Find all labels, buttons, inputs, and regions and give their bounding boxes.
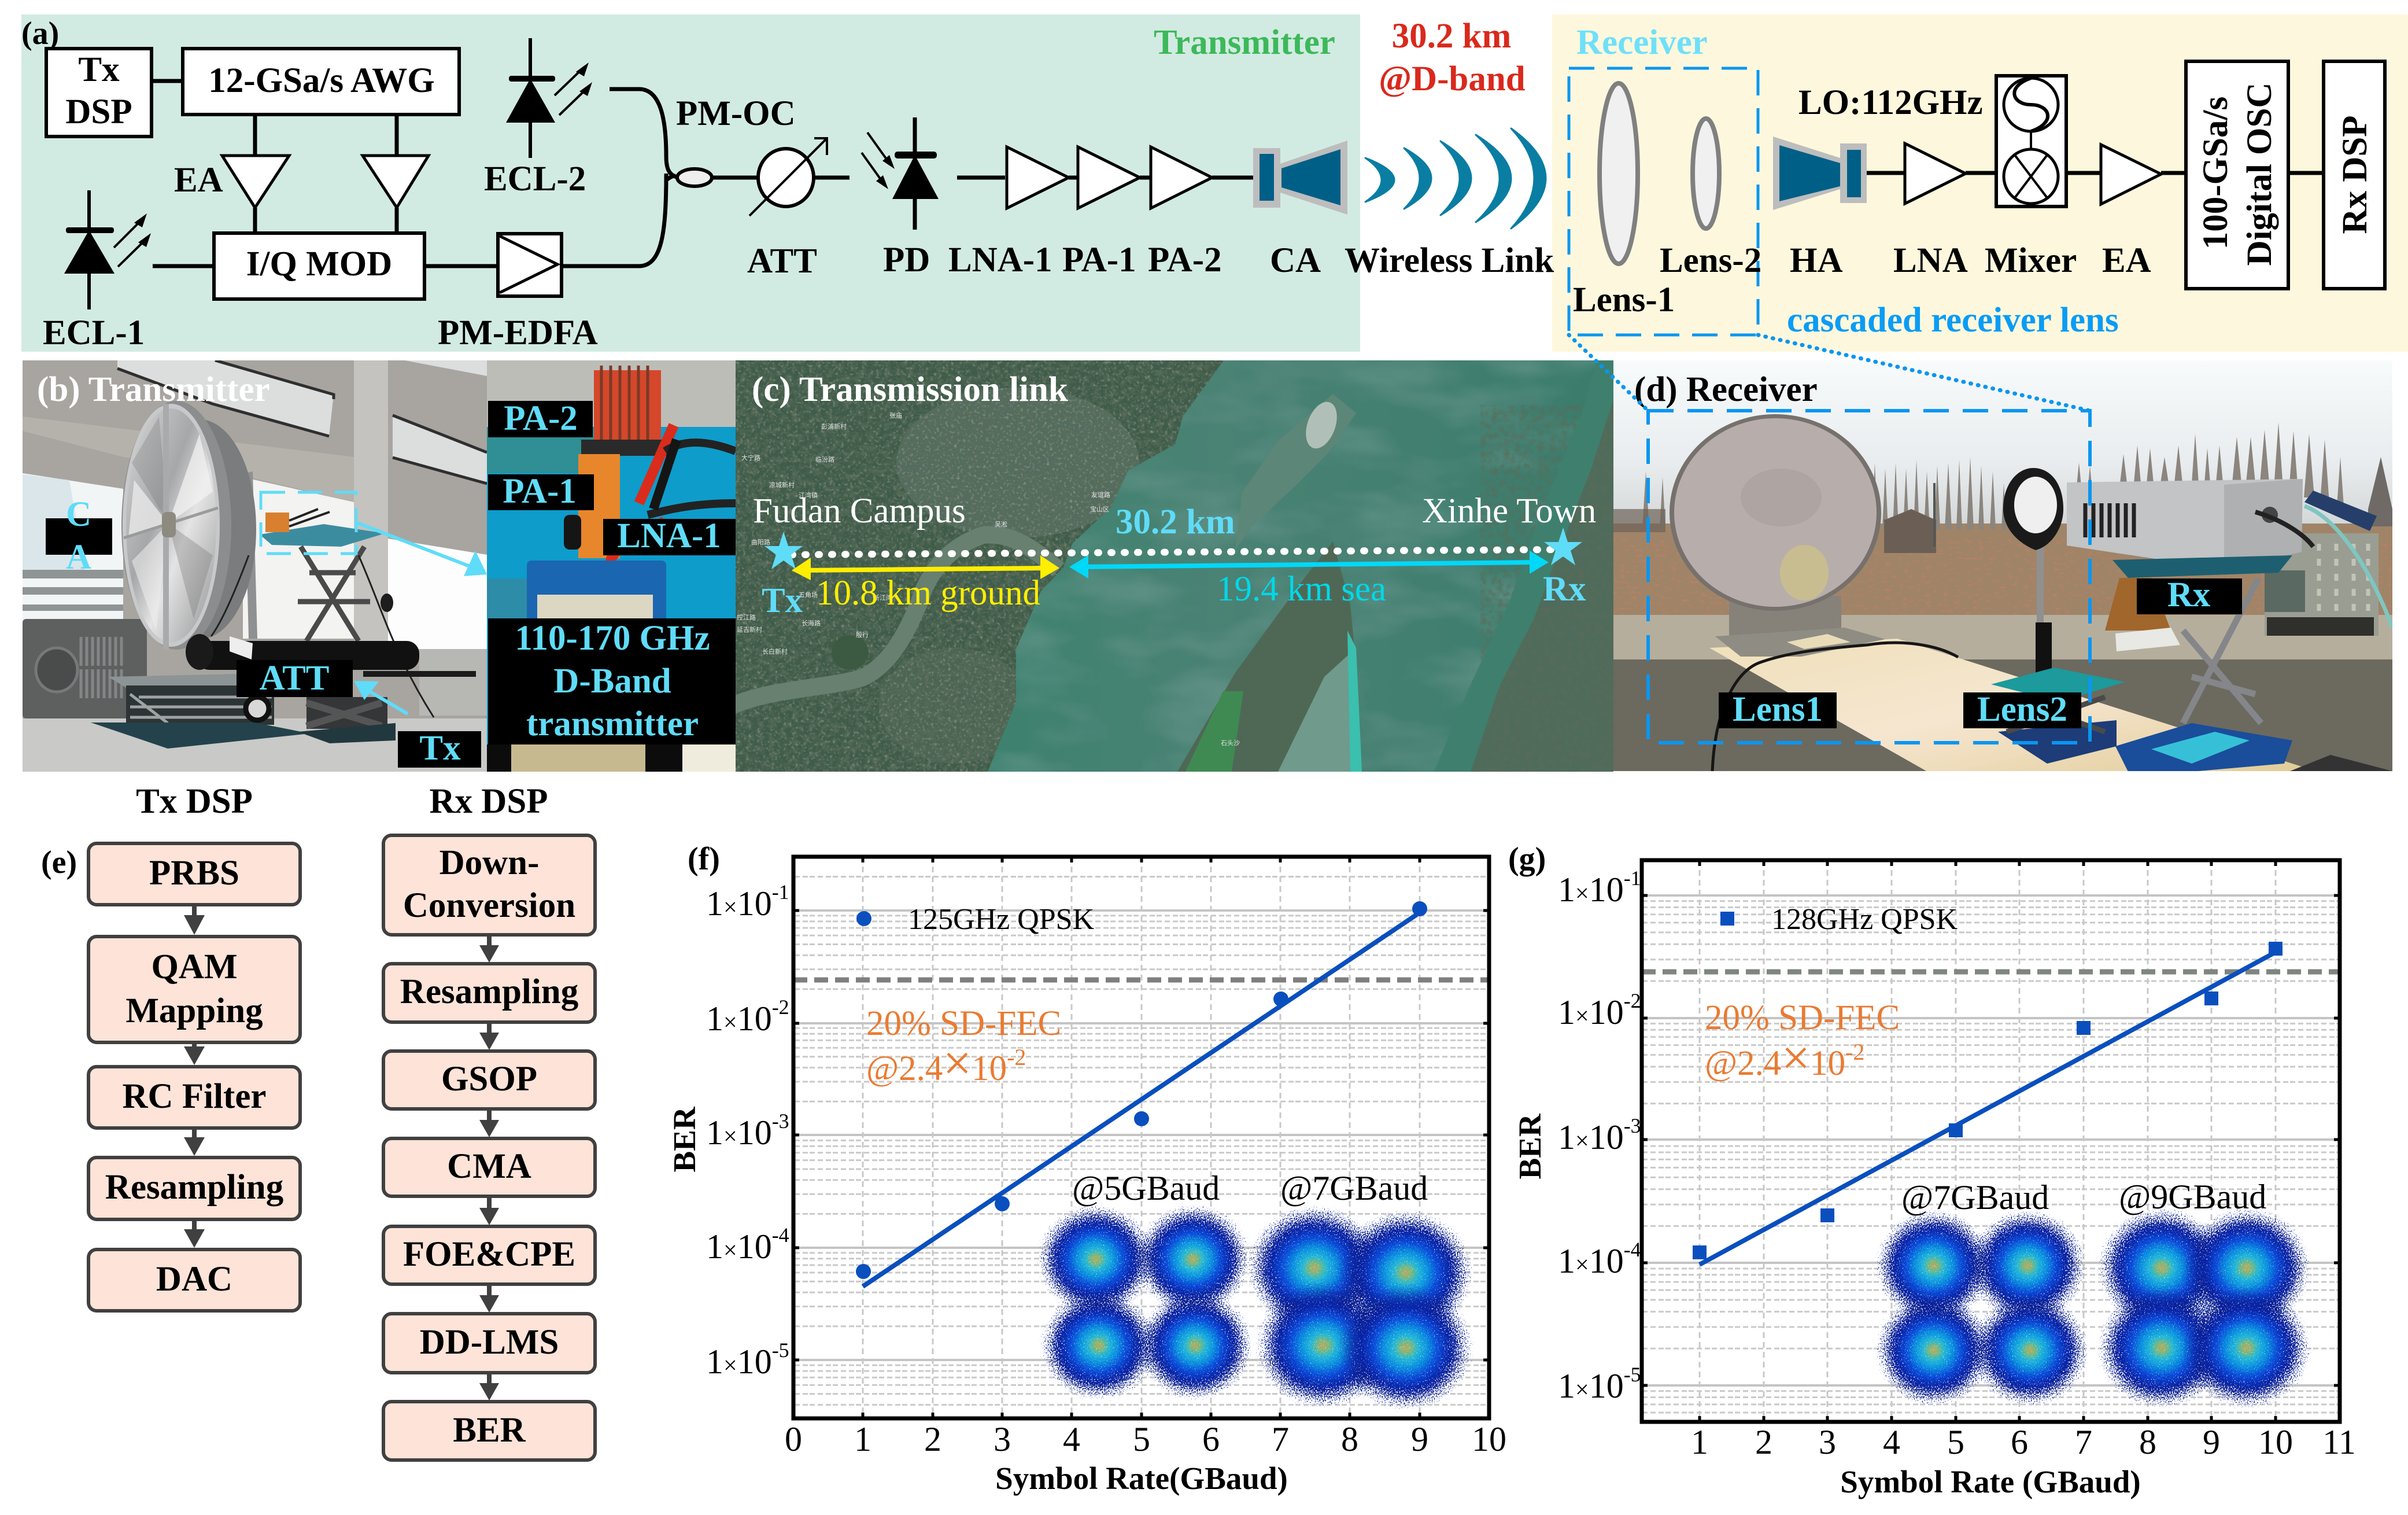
constellation titles <box>1901 1178 2266 1217</box>
Rx box <box>2067 479 2392 628</box>
Lens1 label: Lens1 <box>1733 690 1823 729</box>
Tx arrows <box>184 905 205 1248</box>
caption: cascaded receiver lens: cascaded receiver lens <box>1787 301 2119 340</box>
link distance heading: 30.2 km <box>1392 17 1511 56</box>
map place labels: 五角场 <box>799 590 818 599</box>
mixer: Mixer <box>1985 241 2077 280</box>
amplifier chain: PA-2 <box>1148 241 1222 279</box>
Rx star <box>1544 528 1582 565</box>
link distance heading: @D-band <box>1379 60 1526 98</box>
map place labels: 控江路 <box>737 613 756 622</box>
zoom arrow <box>357 523 487 576</box>
attenuator tube <box>186 634 419 670</box>
x tick labels: 6 <box>1202 1420 1220 1458</box>
QAM Mapping: QAM <box>151 948 238 986</box>
heat sink <box>581 366 674 456</box>
map place labels: 大宁路 <box>741 453 760 462</box>
plot grid <box>793 857 1489 1418</box>
map place labels: 江湾镇 <box>799 491 818 500</box>
y tick labels: -3 <box>1624 1114 1641 1137</box>
PM-EDFA: PM-EDFA <box>438 314 598 352</box>
horn antenna: HA <box>1790 241 1842 280</box>
AWG box <box>183 49 459 115</box>
oscilloscope box: 100-GSa/s <box>2196 97 2235 249</box>
Resampling <box>383 964 595 1022</box>
Cassegrain antenna <box>1253 141 1347 280</box>
PA-2 label: PA-2 <box>504 399 578 438</box>
y axis title: BER <box>1512 1113 1548 1179</box>
Tx label <box>398 729 481 768</box>
x axis title: Symbol Rate (GBaud) <box>1840 1464 2141 1499</box>
RC Filter <box>88 1067 300 1128</box>
map place labels <box>737 411 1240 747</box>
small transmitter on platform <box>260 509 385 547</box>
plot frame and ticks <box>1642 860 2340 1422</box>
transmitter schematic <box>43 38 1347 352</box>
y tick labels: 1×10 <box>1558 1118 1624 1156</box>
Lens2 label: Lens2 <box>1977 690 2067 729</box>
Resampling: Resampling <box>400 972 578 1011</box>
FEC annotation <box>1705 998 1900 1086</box>
lens dashed box <box>1569 68 1758 335</box>
lens 1 <box>1573 83 1675 319</box>
y tick labels: 1×10 <box>706 1343 772 1381</box>
site label: Fudan Campus: Fudan Campus <box>753 492 966 530</box>
Tx DSP box <box>46 49 152 137</box>
blue device <box>527 561 666 636</box>
QAM Mapping: Mapping <box>125 991 263 1030</box>
y tick labels: -2 <box>1624 989 1641 1012</box>
panel f: BER chart 125 GHz <box>667 841 1506 1496</box>
ATT label: ATT <box>260 659 329 698</box>
constellation @9GBaud <box>2097 1207 2311 1409</box>
heading: Receiver: Receiver <box>1576 23 1708 62</box>
attenuator <box>747 138 827 281</box>
lens 2 on post <box>1991 468 2125 764</box>
dotted line-of-sight path <box>792 550 1557 555</box>
y tick labels: 1×10 <box>1558 1242 1624 1280</box>
D-band transmitter label: 110-170 GHz <box>515 619 710 658</box>
Tx label: Tx <box>419 729 461 768</box>
y tick labels <box>1558 867 1641 1405</box>
LNA <box>1893 143 1968 280</box>
x tick labels: 5 <box>1947 1423 1964 1461</box>
panel heading d: (d) Receiver <box>1634 370 1818 409</box>
x tick labels: 8 <box>1341 1420 1358 1458</box>
CMA <box>383 1138 595 1196</box>
I/Q modulator <box>214 233 424 299</box>
map place labels: 长白新村 <box>762 647 788 656</box>
x tick labels: 10 <box>2258 1423 2293 1461</box>
plot frame and ticks <box>793 857 1489 1418</box>
constellation @7GBaud <box>1875 1209 2089 1407</box>
ATT arrow <box>354 681 408 714</box>
PA-1 label <box>488 472 594 511</box>
EA <box>2101 145 2161 280</box>
y tick labels: -4 <box>772 1223 789 1247</box>
FEC annotation <box>866 1004 1061 1092</box>
photo c: satellite map of transmission link <box>730 360 1613 772</box>
concrete wall <box>1613 615 2392 771</box>
hut <box>1883 509 1937 553</box>
constellation titles: @9GBaud <box>2119 1178 2266 1216</box>
map place labels: 吴淞 <box>995 519 1007 529</box>
GSOP <box>383 1051 595 1109</box>
oscilloscope box: Digital OSC <box>2240 83 2279 266</box>
x axis title: Symbol Rate(GBaud) <box>995 1461 1288 1496</box>
cyan sea arrow <box>1069 551 1549 578</box>
wireless link waves <box>1365 128 1546 228</box>
constellation titles <box>1072 1169 1428 1207</box>
x tick labels: 6 <box>2011 1423 2028 1461</box>
DD-LMS: DD-LMS <box>420 1323 559 1362</box>
GSOP: GSOP <box>441 1060 537 1099</box>
Rx label: Rx <box>2167 576 2211 614</box>
Rx arrows <box>479 935 499 1400</box>
attenuator: ATT <box>747 242 817 281</box>
EA amplifiers <box>174 156 429 208</box>
EA: EA <box>2102 241 2151 280</box>
x tick labels: 5 <box>1133 1420 1150 1458</box>
label: Wireless Link: Wireless Link <box>1345 241 1554 280</box>
FOE and CPE <box>383 1226 595 1284</box>
y tick labels: -3 <box>772 1109 789 1133</box>
Tx DSP box: Tx <box>78 50 120 89</box>
QAM Mapping <box>88 937 300 1042</box>
Rx label <box>2137 576 2242 614</box>
DD-LMS <box>383 1314 595 1373</box>
FEC threshold <box>793 978 1489 982</box>
FEC threshold <box>1642 970 2340 974</box>
heading: Transmitter: Transmitter <box>1154 23 1335 62</box>
right bank <box>1471 399 1613 772</box>
Tx DSP column <box>88 782 300 1311</box>
map place labels: 延吉新村 <box>737 625 762 634</box>
sandbar <box>1235 394 1356 550</box>
constellation @7GBaud <box>1246 1204 1474 1411</box>
FEC annotation: 20% SD-FEC <box>866 1004 1061 1043</box>
FEC annotation: -2 <box>1007 1044 1026 1070</box>
panel a: transmitter background <box>21 14 1360 352</box>
panel label f: (f) <box>688 841 720 877</box>
y tick labels: -5 <box>1624 1363 1641 1386</box>
oscilloscope box <box>2186 61 2288 289</box>
BER: BER <box>453 1411 526 1450</box>
y tick labels: -1 <box>772 880 789 904</box>
Chongming island <box>1177 541 1362 772</box>
ATT label <box>237 659 353 698</box>
constellation titles: @7GBaud <box>1280 1169 1428 1207</box>
x tick labels: 4 <box>1883 1423 1900 1461</box>
PRBS <box>88 843 300 905</box>
y tick labels: -1 <box>1624 867 1641 890</box>
ECL-2 laser <box>484 38 592 198</box>
D-band transmitter label: D-Band <box>553 662 671 701</box>
photo b: transmitter setup <box>23 360 487 772</box>
DAC: DAC <box>156 1260 232 1299</box>
map place labels: 凉城新村 <box>769 480 795 489</box>
river <box>730 535 1058 707</box>
constellation titles: @5GBaud <box>1072 1169 1220 1207</box>
panel heading c: (c) Transmission link <box>752 370 1068 409</box>
mixer <box>1985 76 2077 280</box>
roof windows <box>117 360 487 484</box>
wooden board <box>1709 639 2318 772</box>
y tick labels: 1×10 <box>706 884 772 923</box>
label: sea distance: 19.4 km sea <box>1217 570 1386 609</box>
y tick labels: -2 <box>772 996 789 1019</box>
lower jack left <box>91 674 310 749</box>
map place labels: 宝山区 <box>1090 504 1109 514</box>
PM-EDFA <box>438 234 598 352</box>
CA label: C <box>66 495 91 534</box>
x tick labels: 3 <box>994 1420 1011 1458</box>
LO label: LO:112GHz <box>1798 83 1983 122</box>
x tick labels: 0 <box>785 1420 802 1458</box>
ECL-1 laser: ECL-1 <box>43 314 145 352</box>
dish antenna <box>121 401 256 650</box>
panel g: BER chart 128 GHz <box>1508 841 2356 1499</box>
x tick labels: 2 <box>924 1420 941 1458</box>
CA label: A <box>66 538 91 577</box>
label: Tx: Tx <box>762 581 803 620</box>
oscilloscope <box>2265 533 2379 636</box>
Resampling: Resampling <box>105 1168 283 1207</box>
photodiode: PD <box>883 241 930 279</box>
tree line <box>1642 422 2344 529</box>
link distance heading <box>1379 17 1526 98</box>
panel label a: (a) <box>21 16 59 51</box>
Rx DSP heading: Rx DSP <box>429 782 548 821</box>
constellation titles: @7GBaud <box>1901 1178 2049 1217</box>
y tick labels <box>706 880 789 1381</box>
panel a: receiver background <box>1552 14 2408 352</box>
y tick labels: 1×10 <box>706 1114 772 1152</box>
panel heading b: (b) Transmitter <box>37 370 270 409</box>
D-band transmitter label <box>488 618 736 744</box>
PRBS: PRBS <box>149 854 239 893</box>
constellation @5GBaud <box>1037 1204 1253 1401</box>
FOE and CPE: FOE&CPE <box>403 1235 575 1274</box>
Tx star <box>764 532 803 569</box>
panel e: DSP flow charts <box>41 782 595 1460</box>
lens 2 <box>1660 119 1761 280</box>
amplifier chain: LNA-1 <box>948 241 1052 279</box>
zoom selection box <box>261 492 356 554</box>
y tick labels: 1×10 <box>706 1000 772 1038</box>
mainland <box>730 360 1233 772</box>
y tick labels: 1×10 <box>706 1228 772 1266</box>
receiver schematic <box>1569 61 2385 340</box>
Down-Conversion <box>383 835 595 935</box>
lower jack right <box>298 697 396 743</box>
LNA: LNA <box>1893 241 1968 280</box>
x tick labels: 10 <box>1472 1420 1506 1458</box>
map place labels: 新江湾 <box>873 593 892 602</box>
connection lines <box>152 81 1253 266</box>
map place labels: 石头沙 <box>1221 738 1240 747</box>
CA label <box>46 495 112 577</box>
x tick labels: 9 <box>1411 1420 1428 1458</box>
map place labels: 彭浦新村 <box>821 422 847 431</box>
I/Q modulator: I/Q MOD <box>246 245 392 283</box>
LNA-1 label: LNA-1 <box>617 517 721 555</box>
lens 2: Lens-2 <box>1660 241 1761 280</box>
map place labels: 友谊路 <box>1091 490 1110 499</box>
photo d: receiver setup <box>1613 360 2392 772</box>
fit line <box>863 915 1417 1287</box>
Down-Conversion: Conversion <box>403 886 575 925</box>
y axis title: BER <box>667 1106 702 1173</box>
Resampling <box>88 1158 300 1219</box>
power supply <box>23 619 147 718</box>
Rx DSP box <box>2324 61 2385 289</box>
PA-1 label: PA-1 <box>503 472 577 511</box>
x tick labels: 2 <box>1755 1423 1772 1461</box>
DAC <box>88 1249 300 1311</box>
x tick labels: 4 <box>1063 1420 1080 1458</box>
x tick labels: 1 <box>854 1420 871 1458</box>
ECL-1 laser <box>43 190 151 352</box>
FEC annotation: @2.4×10 <box>1705 1030 1845 1086</box>
label: Rx: Rx <box>1543 570 1586 609</box>
legend: 128GHz QPSK <box>1771 903 1958 936</box>
EA amplifiers: EA <box>174 161 223 200</box>
fit line <box>1700 952 2276 1265</box>
panel label e: (e) <box>41 845 77 880</box>
amplifier chain: PA-1 <box>1062 241 1136 279</box>
D-band transmitter label: transmitter <box>526 705 699 743</box>
open background below roof <box>23 473 487 649</box>
Rx scissor lift <box>2112 555 2292 772</box>
x tick labels <box>785 1420 1506 1458</box>
panel label g: (g) <box>1508 841 1546 877</box>
x tick labels: 7 <box>1272 1420 1289 1458</box>
Rx DSP box: Rx DSP <box>2336 115 2374 234</box>
PM-OC coupler: PM-OC <box>676 94 796 133</box>
legend: 125GHz QPSK <box>908 903 1095 936</box>
y tick labels: 1×10 <box>1558 871 1624 909</box>
y tick labels: 1×10 <box>1558 1367 1624 1405</box>
yellow ground arrow <box>792 555 1059 580</box>
photodiode <box>862 117 939 279</box>
FEC annotation: -2 <box>1845 1039 1864 1065</box>
map place labels: 张庙 <box>889 411 902 420</box>
AWG box: 12-GSa/s AWG <box>208 61 435 100</box>
Cassegrain antenna: CA <box>1270 241 1321 280</box>
site label: Xinhe Town: Xinhe Town <box>1422 492 1596 530</box>
FEC annotation: @2.4×10 <box>866 1035 1007 1092</box>
x tick labels: 11 <box>2322 1423 2356 1461</box>
x tick labels: 1 <box>1691 1423 1708 1461</box>
plot grid <box>1642 860 2340 1422</box>
map place labels: 曲阳路 <box>751 537 770 547</box>
dashed selection box <box>1648 411 2090 743</box>
lens 1: Lens-1 <box>1573 281 1675 319</box>
x tick labels: 3 <box>1819 1423 1836 1461</box>
data points <box>1693 942 2283 1259</box>
map place labels: 临汾路 <box>815 455 834 464</box>
Rx DSP column <box>383 782 595 1460</box>
RC Filter: RC Filter <box>123 1077 266 1116</box>
BER <box>383 1402 595 1460</box>
CMA: CMA <box>447 1147 531 1186</box>
Tx DSP box: DSP <box>65 93 132 131</box>
cloth and power strip <box>2105 578 2180 651</box>
FEC annotation: 20% SD-FEC <box>1705 998 1900 1037</box>
dotted zoom connectors <box>1569 335 2090 411</box>
amplifier chain <box>948 147 1222 279</box>
data points <box>856 901 1427 1279</box>
label: ground distance: 10.8 km ground <box>816 574 1040 613</box>
PM-OC coupler <box>676 94 796 186</box>
map place labels: 长海路 <box>802 618 821 628</box>
label: total 30.2 km: 30.2 km <box>1116 503 1235 541</box>
y tick labels: 1×10 <box>1558 993 1624 1031</box>
horn antenna <box>1773 137 1867 280</box>
map place labels: 殷行 <box>856 630 869 639</box>
Tx DSP heading: Tx DSP <box>136 782 253 821</box>
lens 1 on stand <box>1670 414 1885 657</box>
support strut <box>248 471 257 639</box>
x tick labels: 8 <box>2139 1423 2156 1461</box>
y tick labels: -4 <box>1624 1238 1641 1261</box>
signal line <box>1867 171 2324 175</box>
x tick labels: 9 <box>2203 1423 2220 1461</box>
y tick labels: -5 <box>772 1339 789 1362</box>
scissor lift <box>298 547 370 641</box>
Down-Conversion: Down- <box>440 843 539 882</box>
x tick labels: 7 <box>2075 1423 2092 1461</box>
ECL-2 laser: ECL-2 <box>484 160 586 198</box>
x tick labels <box>1691 1423 2356 1461</box>
photo b2: D-band transmitter close-up <box>487 360 737 772</box>
